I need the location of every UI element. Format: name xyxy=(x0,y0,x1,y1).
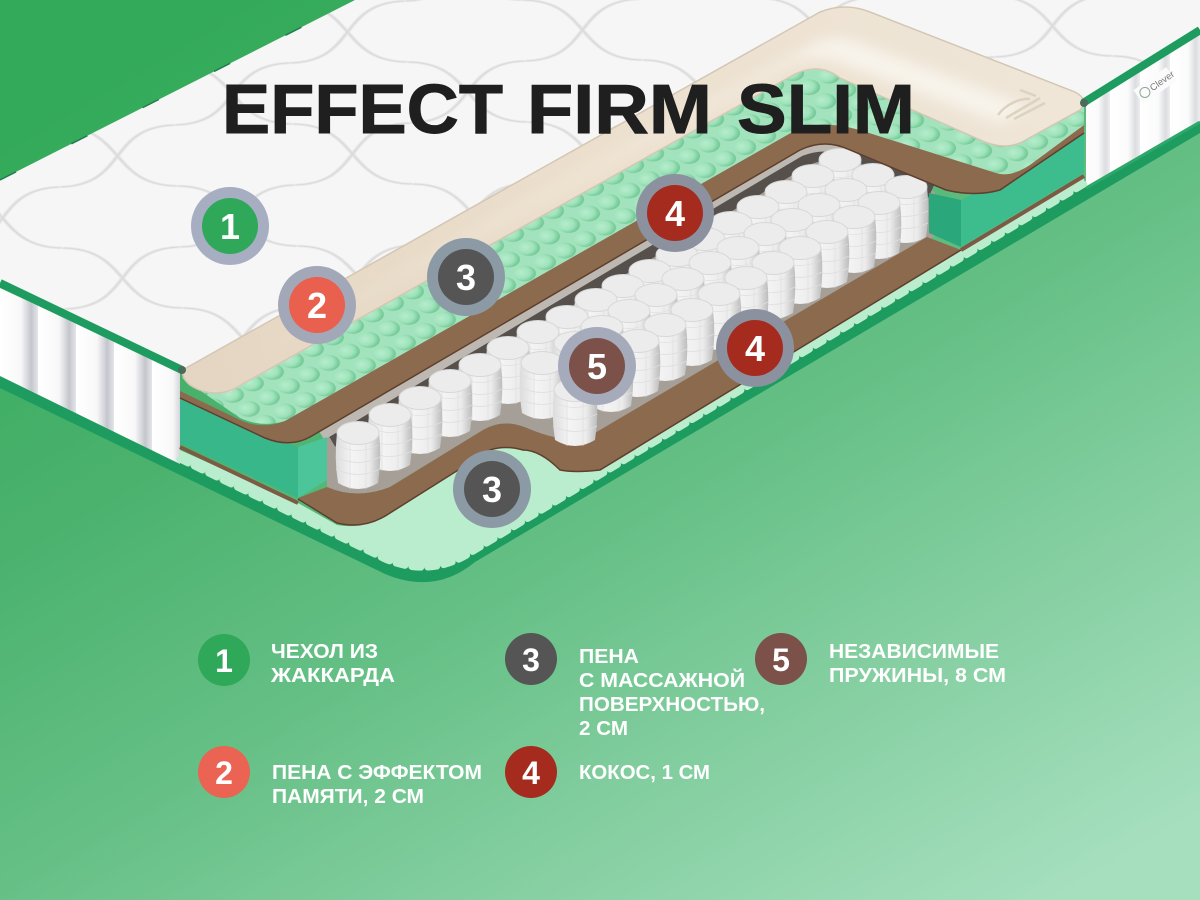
badge 4: upper coconut xyxy=(636,174,714,252)
upper coconut layer xyxy=(180,125,1084,443)
brand tag xyxy=(1133,66,1178,104)
right foam block xyxy=(929,125,1084,247)
title: FIRM xyxy=(527,70,712,148)
badge 3: lower massage foam: 3 xyxy=(482,469,502,510)
legend item 4 xyxy=(505,746,710,798)
badge 4: lower coconut xyxy=(716,309,794,387)
memory foam layer xyxy=(183,7,1084,393)
legend item 5: 5 xyxy=(772,642,790,678)
left side pleated panel xyxy=(0,288,180,464)
badge 3: upper massage foam: 3 xyxy=(456,257,476,298)
legend item 3: ПОВЕРХНОСТЬЮ, xyxy=(579,694,765,716)
legend item 2: ПЕНА С ЭФФЕКТОМ xyxy=(272,762,482,784)
mattress illustration xyxy=(0,0,1200,582)
legend xyxy=(198,633,1006,808)
piping left xyxy=(0,283,186,374)
legend item 3: 3 xyxy=(522,642,540,678)
quilted top cover xyxy=(0,0,1200,395)
legend item 2: 2 xyxy=(215,755,233,791)
title xyxy=(222,70,915,148)
badge 1: cover xyxy=(191,187,269,265)
legend item 1: 1 xyxy=(215,643,233,679)
title: EFFECT xyxy=(222,70,503,148)
badge 5: springs: 5 xyxy=(587,346,607,387)
left foam block xyxy=(180,398,327,498)
piping right xyxy=(1080,30,1200,107)
legend item 4: 4 xyxy=(522,755,540,791)
badge 3: upper massage foam xyxy=(427,238,505,316)
legend item 3: С МАССАЖНОЙ xyxy=(579,668,745,692)
bottom massage foam layer xyxy=(180,178,1084,567)
legend item 4: КОКОС, 1 СМ xyxy=(579,762,710,784)
legend item 1: ЖАККАРДА xyxy=(270,665,395,687)
cover top edge xyxy=(0,0,355,180)
badge 5: springs xyxy=(558,327,636,405)
legend item 2: ПАМЯТИ, 2 СМ xyxy=(272,786,424,808)
bottom coconut layer xyxy=(298,237,961,525)
legend item 3: 2 СМ xyxy=(579,718,628,740)
green border strip xyxy=(0,116,1200,582)
legend item 5: НЕЗАВИСИМЫЕ xyxy=(829,641,999,663)
right side pleated panel xyxy=(1086,35,1200,188)
badge 2: memory foam xyxy=(278,266,356,344)
spring bed xyxy=(322,145,935,494)
legend item 2 xyxy=(198,746,482,808)
legend item 5: ПРУЖИНЫ, 8 СМ xyxy=(829,665,1006,687)
badge 1: cover: 1 xyxy=(220,206,240,247)
legend item 3: ПЕНА xyxy=(579,646,639,668)
badge 4: upper coconut: 4 xyxy=(665,193,685,234)
title: SLIM xyxy=(737,70,915,148)
badge 2: memory foam: 2 xyxy=(307,285,327,326)
brand tag: Clever xyxy=(1148,69,1177,94)
thin coconut line lower xyxy=(180,176,1084,503)
legend item 1 xyxy=(198,634,395,687)
legend item 1: ЧЕХОЛ ИЗ xyxy=(271,641,378,663)
badge 3: lower massage foam xyxy=(453,450,531,528)
badge 4: lower coconut: 4 xyxy=(745,328,765,369)
hand imprint xyxy=(998,90,1045,119)
legend item 3 xyxy=(505,633,765,740)
upper massage foam layer xyxy=(182,60,1084,424)
pocket springs xyxy=(336,148,928,489)
legend item 5 xyxy=(755,633,1006,687)
